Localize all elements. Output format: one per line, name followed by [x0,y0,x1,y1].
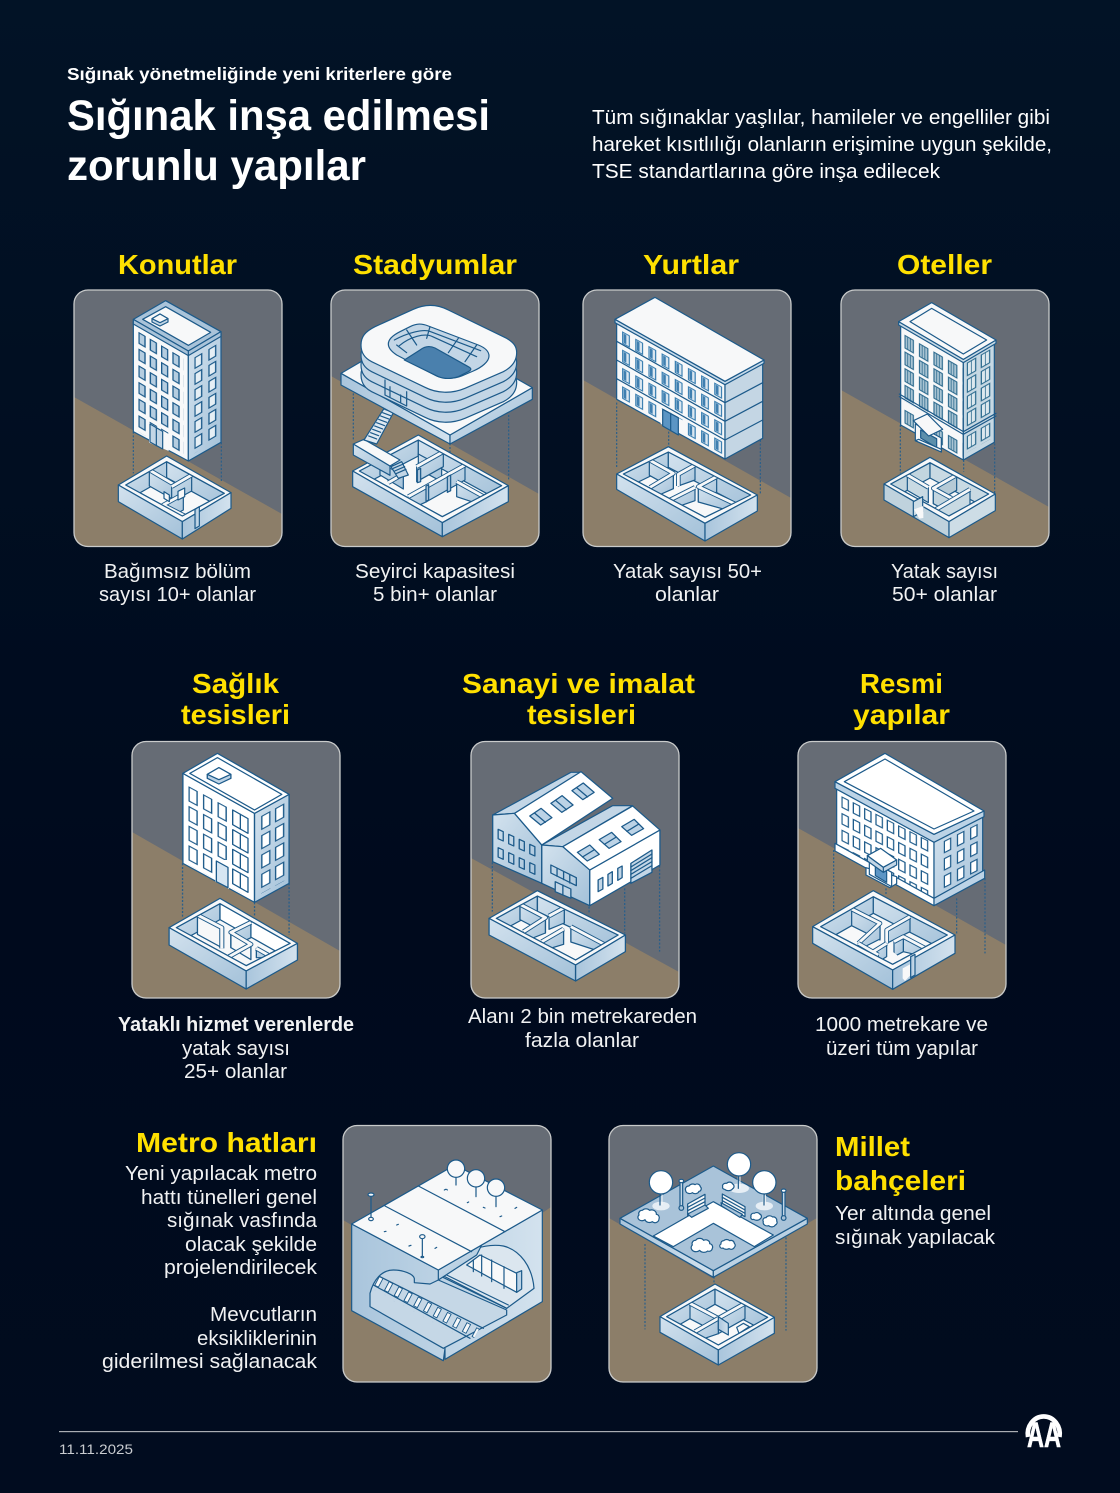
panel: Sanayi ve imalat tesisleri [462,668,697,1052]
card background: Sağlık [132,742,340,998]
heading: Metro hatları: Metro hatları [136,1127,317,1158]
street surface [352,1165,542,1280]
icon: factory with shelter below [489,772,660,981]
building [133,301,221,461]
subtitle: Sığınak yönetmeliğinde yeni kriterlere göre [67,64,452,84]
description: Metro: sığınak vasfında [167,1210,318,1232]
title: zorunlu yapılar [67,142,366,190]
caption: Stadyumlar: 5 bin+ olanlar [373,584,497,606]
caption: Sağlık [118,1014,354,1083]
caption: Sanayi: Alanı 2 bin metrekareden [468,1006,697,1028]
heading: Resmi yapılar [853,668,950,730]
caption: Yurtlar: Yatak sayısı 50+ [613,561,762,583]
heading and text: Millet bahçeleri [835,1131,996,1249]
panel: Yurtlar [583,249,791,606]
shelter basement [884,457,995,538]
heading: Yurtlar: Yurtlar [643,249,739,280]
caption: Resmi [815,1014,988,1060]
description: Metro: olacak şekilde [185,1234,317,1256]
card background: Yurtlar [583,290,791,546]
caption: Yurtlar [613,561,762,606]
heading: Sanayi [462,668,695,730]
building [899,303,996,460]
caption: Resmi: üzeri tüm yapılar [826,1038,978,1060]
description: Millet [835,1203,996,1249]
heading: Millet bahçeleri: bahçeleri [835,1165,966,1196]
stadium body [361,305,517,422]
panel: Konutlar [74,249,282,606]
title: Sığınak inşa edilmesi [67,92,490,140]
intro text: hareket kısıtlılığı olanların erişimine uygun şekilde, [592,134,1052,156]
panel: Metro hatları [102,1126,551,1382]
description: Metro: giderilmesi sağlanacak [102,1351,318,1373]
park platform [620,1166,807,1277]
shelter basement [353,435,508,537]
icon: park with shelter below [620,1153,807,1365]
heading: Millet bahçeleri: Millet [835,1131,910,1162]
description: Metro: Mevcutların [210,1304,317,1326]
card background: Resmi [798,742,1006,998]
shelter basement [118,456,231,539]
shelter basement [489,891,625,981]
icon: metro tunnel cutaway [352,1160,542,1361]
building [183,753,289,902]
heading: Sanayi: Sanayi ve imalat [462,668,695,699]
intro text [592,107,1052,183]
date: 11.11.2025 [59,1442,133,1457]
heading: Sağlık tesisleri [181,668,290,730]
panel: Oteller [841,249,1049,606]
logo: AA: AA [1027,1416,1061,1455]
heading: Resmi yapılar: Resmi [860,668,943,699]
description: Millet: Yer altında genel [835,1203,991,1225]
card background: Sanayi [471,742,679,998]
intro text: Tüm sığınaklar yaşlılar, hamileler ve engelliler gibi [592,107,1050,129]
caption: Sanayi [468,1006,697,1052]
logo: AA [1027,1416,1061,1455]
caption: Oteller [891,561,998,606]
heading: Sağlık tesisleri: Sağlık [192,668,279,699]
icon: hotel with shelter below [884,303,996,538]
shelter basement [813,891,955,989]
shelter basement [169,898,297,989]
description: Metro: projelendirilecek [164,1257,318,1279]
header [67,64,1052,190]
card background: Konutlar [74,290,282,546]
cutaway block [352,1210,542,1361]
caption: Stadyumlar [355,561,515,606]
caption: Sanayi: fazla olanlar [525,1030,639,1052]
heading: Konutlar: Konutlar [118,249,237,280]
caption: Konutlar: sayısı 10+ olanlar [99,584,256,606]
building [835,753,985,906]
card background: Stadyumlar [331,290,539,546]
caption: Konutlar: Bağımsız bölüm [104,561,251,583]
caption: Yurtlar: olanlar [655,584,719,606]
heading: Stadyumlar: Stadyumlar [353,249,517,280]
panel: Resmi yapılar [798,668,1006,1060]
footer [59,1416,1061,1457]
trees and lamps [368,1160,517,1258]
description: Metro [102,1163,318,1373]
description: Millet: sığınak yapılacak [835,1227,996,1249]
caption: Sağlık: Yataklı hizmet verenlerde [118,1014,354,1036]
heading: Oteller: Oteller [897,249,992,280]
panel: Millet bahçeleri [609,1126,996,1382]
icon: hospital with shelter below [169,753,297,989]
icon: apartment building with shelter below [118,301,231,539]
card background: Metro [343,1126,551,1382]
caption: Oteller: Yatak sayısı [891,561,998,583]
heading: Millet bahçeleri [835,1131,966,1196]
caption: Sağlık: yatak sayısı [182,1038,290,1060]
card background: Millet [609,1126,817,1382]
description: Metro: Yeni yapılacak metro [125,1163,317,1185]
icon: public building with shelter below [813,753,985,989]
icon: dormitory with shelter below [615,297,764,541]
caption: Konutlar [99,561,256,606]
card background: Oteller [841,290,1049,546]
heading: Resmi yapılar: yapılar [853,699,950,730]
heading: Sağlık tesisleri: tesisleri [181,699,290,730]
panel: Sağlık tesisleri [118,668,354,1083]
shelter basement [660,1284,774,1365]
intro text: TSE standartlarına göre inşa edilecek [592,161,941,183]
caption: Stadyumlar: Seyirci kapasitesi [355,561,515,583]
description: Metro: hattı tünelleri genel [141,1187,317,1209]
stadium platform [341,325,532,444]
icon: stadium with shelter below [341,305,532,537]
caption: Oteller: 50+ olanlar [892,584,997,606]
front hall [542,806,660,906]
caption: Resmi: 1000 metrekare ve [815,1014,988,1036]
stairs down [353,402,408,478]
shelter basement [617,447,757,541]
trees, benches, lamps [638,1153,786,1252]
caption: Sağlık: 25+ olanlar [184,1061,287,1083]
heading: Sanayi: tesisleri [527,699,636,730]
description: Metro: eksikliklerinin [197,1328,317,1350]
title [67,92,490,190]
heading and text: Metro hatları [102,1127,318,1373]
rear hall [493,772,613,883]
building [615,297,764,460]
panel: Stadyumlar [331,249,539,606]
